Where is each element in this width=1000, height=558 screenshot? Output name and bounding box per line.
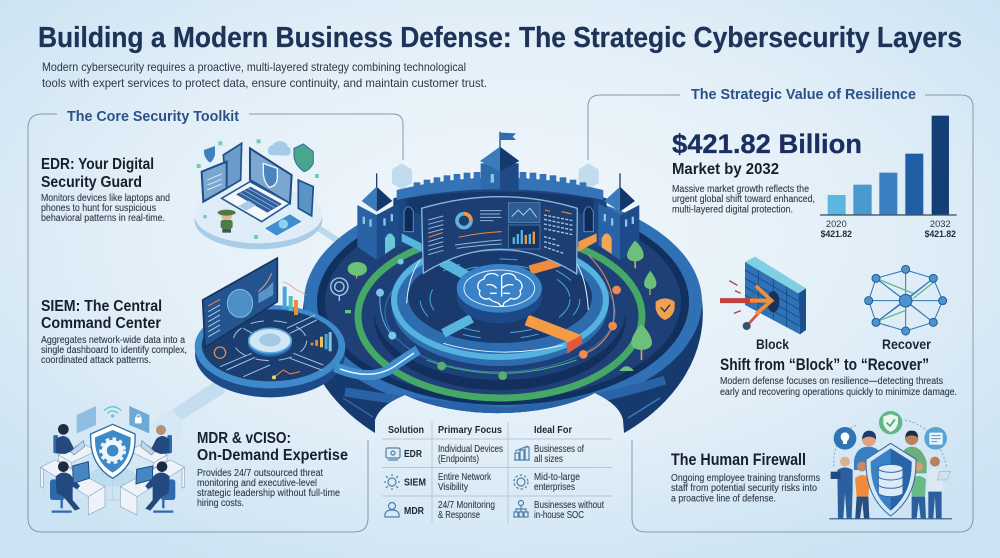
- illustration: castle details: [331, 132, 675, 380]
- front row people: [50, 461, 175, 512]
- left tower: [357, 173, 398, 260]
- row: EDR: Individual Devices: [438, 444, 503, 455]
- stat: market value: urgent global shift toward enhanced,: [672, 194, 815, 205]
- text: MDR and vCISO: strategic leadership without full-time: [197, 488, 340, 499]
- back row people: [53, 424, 172, 455]
- table grid: [382, 422, 612, 523]
- text: SIEM: [41, 298, 187, 366]
- chart axis labels: $421.82: [925, 229, 956, 239]
- text: SIEM: coordinated attack patterns.: [41, 355, 151, 366]
- row: MDR: in-house SOC: [534, 510, 584, 521]
- text: SIEM: SIEM: The Central: [41, 298, 162, 315]
- row: EDR: (Endpoints): [438, 454, 479, 465]
- text: SIEM: Aggregates network-wide data into a: [41, 335, 186, 346]
- text: EDR: behavioral patterns in real-time.: [41, 213, 165, 224]
- illustration: castle platform: [303, 189, 703, 433]
- central tower and flag: [480, 132, 519, 189]
- platform rings: [304, 189, 702, 415]
- row: SIEM: Mid-to-large: [534, 472, 580, 483]
- row: EDR: EDR: [404, 448, 422, 460]
- stat: market value: Massive market growth reflects the: [672, 184, 809, 195]
- row: MDR: Businesses without: [534, 500, 604, 511]
- trees and shrubs: [345, 241, 657, 371]
- icon: recover network: [865, 265, 947, 335]
- text: SIEM: Command Center: [41, 315, 161, 332]
- platform base: [303, 300, 703, 433]
- text: MDR and vCISO: monitoring and executive-level: [197, 478, 317, 489]
- text: MDR and vCISO: MDR & vCISO:: [197, 430, 291, 447]
- label: block: Block: [756, 336, 789, 352]
- text: human firewall: [671, 451, 820, 504]
- connector: EDR to castle: [312, 224, 340, 242]
- curved node lines: [376, 255, 621, 380]
- text: human firewall: The Human Firewall: [671, 451, 806, 469]
- row: SIEM: Entire Network: [438, 472, 492, 483]
- brain hub: [457, 264, 542, 323]
- panel: strategic value frame: [588, 95, 973, 532]
- ring white arcs: [407, 260, 588, 352]
- bars: [214, 282, 332, 379]
- row: MDR: & Response: [438, 510, 480, 521]
- comparison table: [382, 422, 612, 523]
- bar chart: market growth: [820, 116, 957, 239]
- text: shift from block to recover: [720, 355, 957, 398]
- illustration: SIEM platform: [195, 258, 345, 397]
- text: shift from block to recover: early and recovering operations quickly to minimize damage.: [720, 387, 957, 398]
- row: EDR: Businesses of: [534, 444, 584, 455]
- stat: market value: $421.82 Billion: [672, 129, 862, 159]
- hexagon markers: [392, 163, 599, 189]
- icon: network globe: [331, 278, 348, 301]
- text: human firewall: a proactive line of defense.: [671, 494, 776, 504]
- stat: market value: [672, 129, 862, 216]
- icon: firewall block: [720, 257, 806, 334]
- chart axis labels: 2020: [826, 219, 847, 229]
- shield with gear: [91, 424, 135, 478]
- row: SIEM: [384, 472, 580, 493]
- path from SIEM to castle ring: [335, 350, 660, 418]
- intro text: Modern cybersecurity requires a proactive, multi-layered strategy combining technological: [42, 60, 466, 74]
- desks: [41, 443, 185, 515]
- text: EDR: [41, 156, 170, 224]
- chat bubbles and wifi: [77, 406, 149, 433]
- icon: human firewall team: [829, 411, 952, 519]
- heading: strategic value: The Strategic Value of Resilience: [691, 87, 916, 103]
- stat: market value: Market by 2032: [672, 161, 779, 178]
- text: EDR: EDR: Your Digital: [41, 156, 154, 173]
- text: EDR: Security Guard: [41, 174, 142, 191]
- label: recover: Recover: [882, 336, 931, 352]
- row: SIEM: Visibility: [438, 482, 468, 493]
- table header: Ideal For: [534, 424, 572, 436]
- spokes: [442, 262, 582, 354]
- dashboard panel: [203, 258, 277, 347]
- text: SIEM: single dashboard to identify complex,: [41, 345, 187, 356]
- row: EDR: [386, 444, 584, 465]
- text: shift from block to recover: Shift from “Block” to “Recover”: [720, 355, 929, 374]
- castle wall: [393, 180, 607, 247]
- table header: [388, 424, 572, 436]
- text: EDR: Monitors devices like laptops and: [41, 193, 170, 204]
- row: SIEM: enterprises: [534, 482, 575, 493]
- row: MDR: 24/7 Monitoring: [438, 500, 495, 511]
- radial data lines: [220, 315, 323, 377]
- row: EDR: all sizes: [534, 454, 563, 465]
- text: MDR and vCISO: On-Demand Expertise: [197, 447, 348, 464]
- intro text: tools with expert services to protect data, ensure continuity, and maintain customer trust.: [42, 76, 487, 90]
- text: EDR: phones to hunt for suspicious: [41, 203, 156, 214]
- right tower: [598, 173, 639, 260]
- intro text: [42, 60, 487, 90]
- text: human firewall: staff from potential security risks into: [671, 483, 817, 494]
- icon: orange shield: [656, 298, 675, 320]
- heading: core security toolkit: The Core Security Toolkit: [67, 109, 239, 125]
- connector: MDR to SIEM: [150, 380, 226, 440]
- table header: Primary Focus: [438, 424, 502, 436]
- database shield: [866, 443, 916, 516]
- text: MDR and vCISO: [197, 430, 348, 509]
- table header: Solution: [388, 424, 424, 436]
- text: MDR and vCISO: hiring costs.: [197, 498, 244, 509]
- dashboard screen: [422, 197, 577, 274]
- orange and teal bridges: [402, 233, 597, 252]
- chart axis labels: $421.82: [821, 229, 852, 239]
- chart axis labels: 2032: [930, 219, 951, 229]
- icon: MDR team around shield: [41, 406, 185, 515]
- back row people: [854, 431, 927, 473]
- text: MDR and vCISO: Provides 24/7 outsourced threat: [197, 468, 323, 479]
- panel: core security toolkit frame: [28, 114, 403, 532]
- icon: EDR devices on disc: [194, 139, 322, 249]
- text: shift from block to recover: Modern defense focuses on resilience—detecting threats: [720, 376, 943, 387]
- chart axis labels: [821, 219, 956, 239]
- front row people: [831, 457, 951, 518]
- text: human firewall: Ongoing employee training transforms: [671, 473, 820, 484]
- row: MDR: MDR: [404, 505, 424, 517]
- row: MDR: [385, 500, 604, 521]
- stat: market value: multi-layered digital protection.: [672, 204, 793, 216]
- row: SIEM: SIEM: [404, 476, 426, 488]
